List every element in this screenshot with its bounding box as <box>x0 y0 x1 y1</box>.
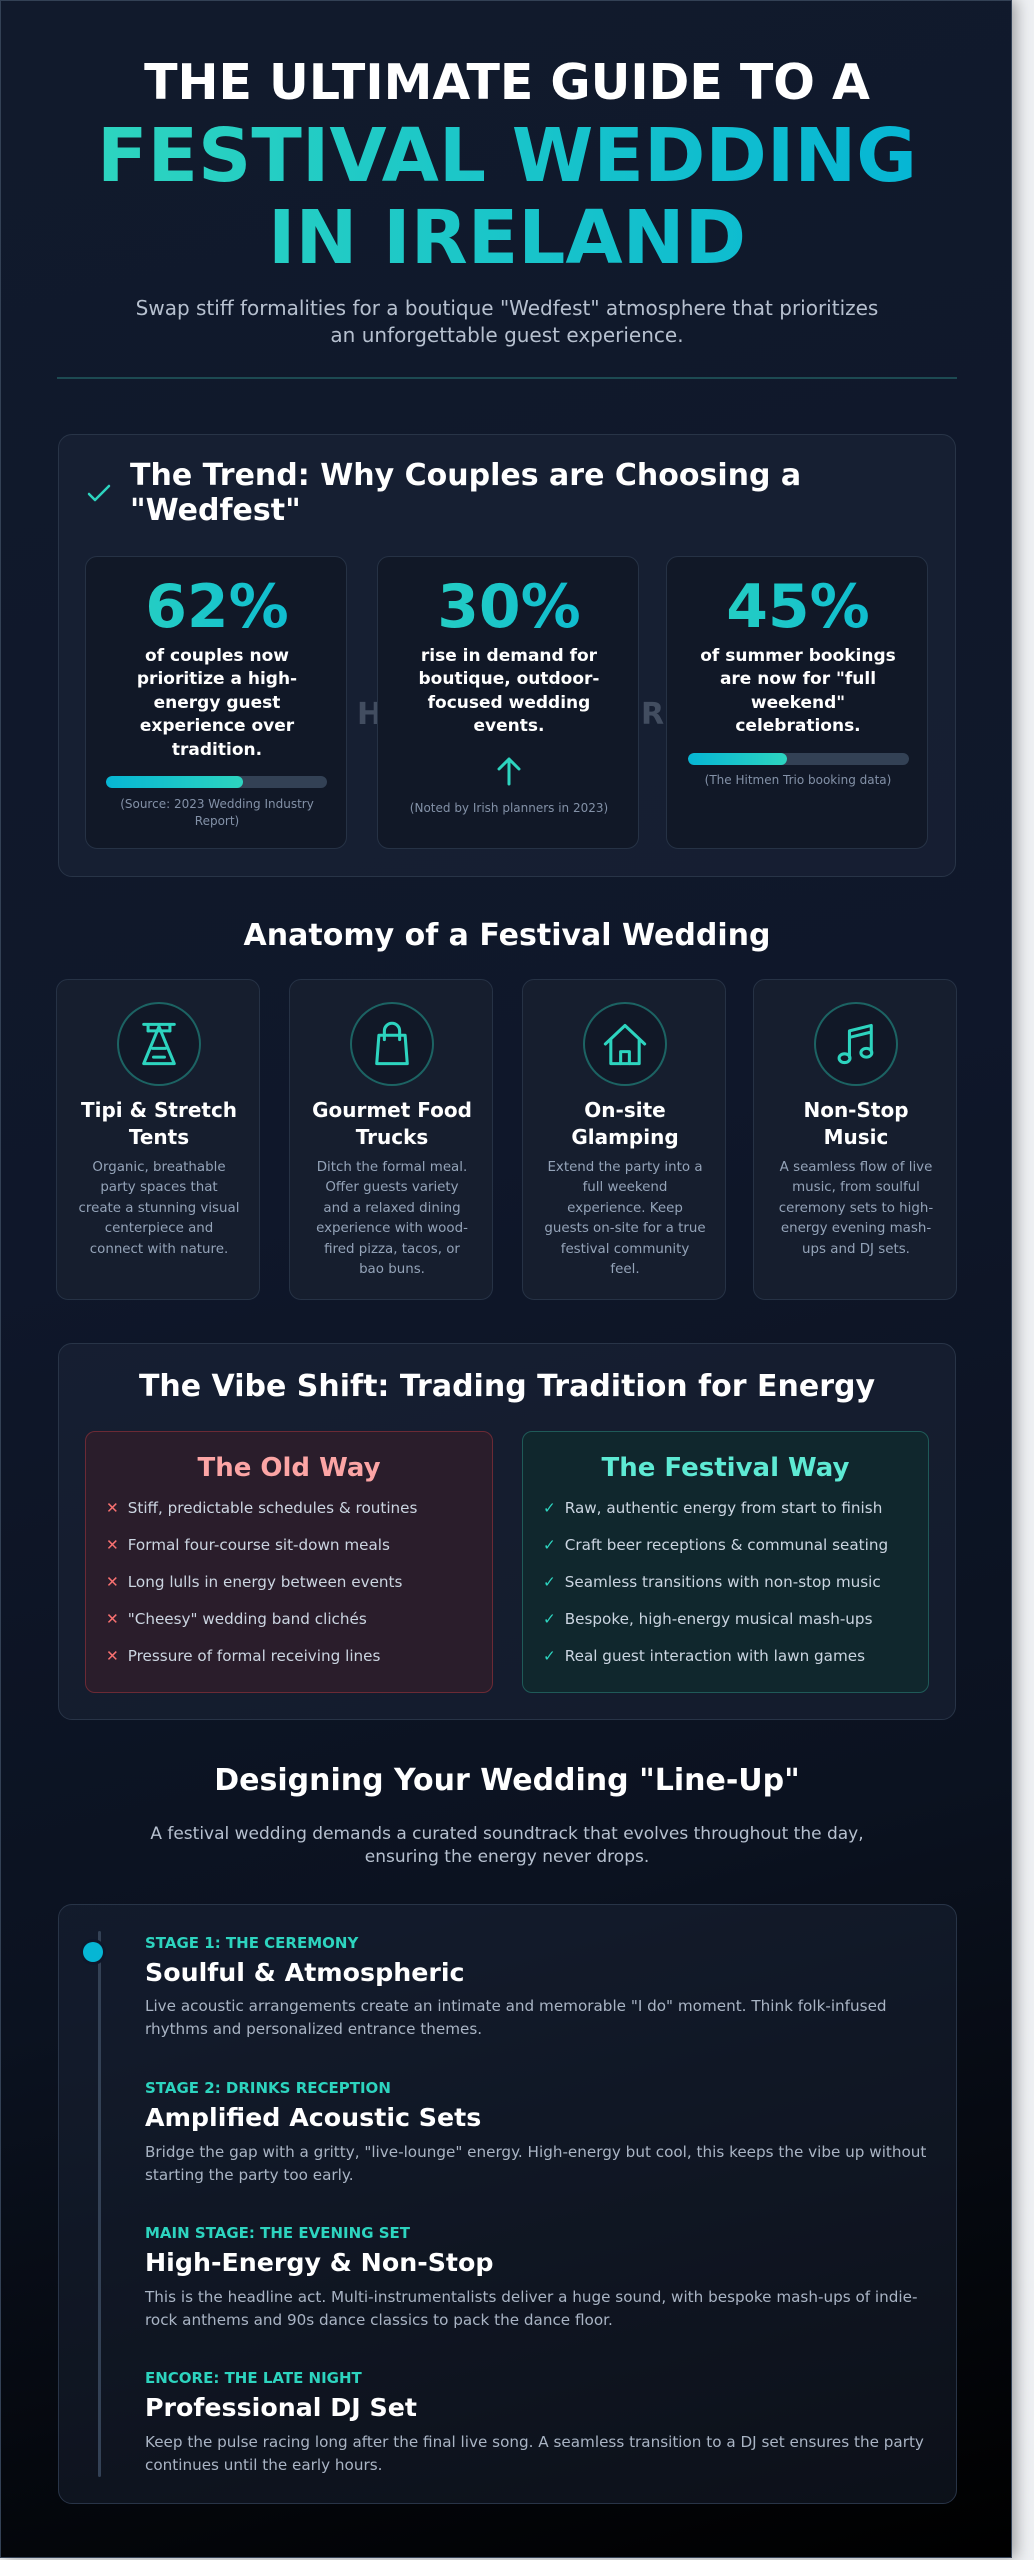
card: food trucks: bao buns. <box>359 1262 425 1277</box>
text: Amplified Acoustic Sets <box>145 2103 481 2132</box>
text: rock anthems and 90s dance classics to pack the dance floor. <box>145 2311 613 2329</box>
icon: tent <box>117 1002 201 1086</box>
icon: house <box>583 1002 667 1086</box>
box: festival way: ✓ Seamless transitions with non-stop music <box>543 1573 881 1591</box>
box: festival way: ✓ Craft beer receptions & communal seating <box>543 1536 888 1554</box>
stat card: 62% <box>85 556 347 849</box>
text: ENCORE: THE LATE NIGHT <box>145 2369 362 2387</box>
stat card: 62%: 62% <box>145 572 289 642</box>
progress bar 45% <box>688 753 909 765</box>
card: glamping: experience. Keep <box>567 1201 683 1216</box>
card: food trucks: Ditch the formal meal. <box>317 1160 467 1175</box>
text: rhythms and personalized entrance themes. <box>145 2020 482 2038</box>
progress bar 62% <box>106 776 327 788</box>
stat card: 45%: (The Hitmen Trio booking data) <box>705 773 891 787</box>
stat card: 45%: weekend" <box>751 693 845 713</box>
panel: vibe shift <box>58 1343 956 1720</box>
heading: the trend <box>130 458 801 528</box>
stat card: 45% <box>666 556 928 849</box>
card: music: ups and DJ sets. <box>802 1242 910 1257</box>
timeline line and dot <box>83 1931 103 2477</box>
panel: the trend <box>58 434 956 877</box>
box: festival way: ✓ Real guest interaction with lawn games <box>543 1647 865 1665</box>
heading: anatomy: Anatomy of a Festival Wedding <box>244 918 770 953</box>
card: food trucks: fired pizza, tacos, or <box>324 1242 460 1257</box>
subtitle: Swap stiff formalities for a boutique "Wedfest" atmosphere that prioritizes <box>136 296 878 320</box>
title: FESTIVAL WEDDING <box>97 113 917 199</box>
card: tents: connect with nature. <box>90 1242 228 1257</box>
box: old way: ✕ Stiff, predictable schedules & routines <box>106 1499 417 1517</box>
text: R <box>641 697 664 732</box>
card: food trucks: Gourmet Food <box>312 1098 472 1122</box>
card: tents <box>56 979 260 1300</box>
card: tents: centerpiece and <box>105 1221 213 1236</box>
card: glamping: feel. <box>610 1262 640 1277</box>
box: old way: ✕ "Cheesy" wedding band clichés <box>106 1610 367 1628</box>
box: festival way: ✓ Bespoke, high-energy musical mash-ups <box>543 1610 872 1628</box>
text: This is the headline act. Multi-instrumentalists deliver a huge sound, with bespoke mash-ups of indie- <box>145 2288 917 2306</box>
box: festival way: The Festival Way <box>602 1453 850 1483</box>
stage 4 <box>145 2369 924 2474</box>
stat card: 62%: Report) <box>195 814 239 828</box>
card: food trucks: Trucks <box>356 1125 428 1149</box>
stat card: 45%: of summer bookings <box>700 646 896 666</box>
text: MAIN STAGE: THE EVENING SET <box>145 2224 410 2242</box>
card: music: energy evening mash- <box>781 1221 931 1236</box>
icon: music note <box>814 1002 898 1086</box>
card: music: music, from soulful <box>792 1180 920 1195</box>
stat card: 62%: of couples now <box>145 646 289 666</box>
icon: check <box>88 484 110 502</box>
stat card: 30%: boutique, outdoor- <box>419 669 599 689</box>
stat card: 45%: are now for "full <box>720 669 876 689</box>
card: tents: Tents <box>129 1125 189 1149</box>
stat card: 30%: rise in demand for <box>421 646 597 666</box>
card: glamping <box>522 979 726 1300</box>
card: glamping: Extend the party into a <box>547 1160 703 1175</box>
card: glamping: guests on-site for a true <box>544 1221 706 1236</box>
heading: line-up: Designing Your Wedding "Line-Up" <box>214 1763 800 1798</box>
text: Live acoustic arrangements create an intimate and memorable "I do" moment. Think folk-infused <box>145 1997 887 2015</box>
card: tents: create a stunning visual <box>79 1201 239 1216</box>
stat card: 30%: focused wedding <box>428 693 590 713</box>
text: Bridge the gap with a gritty, "live-lounge" energy. High-energy but cool, this keeps the vibe up without <box>145 2143 926 2161</box>
card: glamping: festival community <box>561 1242 689 1257</box>
card: music: ceremony sets to high- <box>779 1201 933 1216</box>
card: glamping: full weekend <box>583 1180 667 1195</box>
card: tents: Organic, breathable <box>92 1160 226 1175</box>
card: music: Non-Stop <box>803 1098 909 1122</box>
text: Professional DJ Set <box>145 2393 417 2422</box>
card: food trucks: and a relaxed dining <box>323 1201 461 1216</box>
card: music: Music <box>824 1125 888 1149</box>
stat card: 62%: prioritize a high- <box>137 669 297 689</box>
box: old way: ✕ Long lulls in energy between events <box>106 1573 402 1591</box>
heading: the trend: "Wedfest" <box>130 493 301 528</box>
watermark letters <box>357 697 908 786</box>
stat card: 30%: (Noted by Irish planners in 2023) <box>410 801 608 815</box>
text: line-up intro: ensuring the energy never drops. <box>365 1847 649 1867</box>
stat card: 30% <box>377 556 639 849</box>
box: old way: ✕ Formal four-course sit-down meals <box>106 1536 390 1554</box>
icon: up arrow <box>497 757 520 786</box>
text: Keep the pulse racing long after the final live song. A seamless transition to a DJ set ensures the party <box>145 2433 924 2451</box>
card: music <box>753 979 957 1300</box>
stat card: 30%: 30% <box>437 572 581 642</box>
card: food trucks: experience with wood- <box>316 1221 468 1236</box>
stat card: 62%: energy guest <box>154 693 280 713</box>
text: line-up intro <box>150 1824 864 1867</box>
card: glamping: Glamping <box>571 1125 679 1149</box>
stage 2 <box>145 2079 926 2184</box>
text: starting the party too early. <box>145 2166 354 2184</box>
card: tents: Tipi & Stretch <box>81 1098 237 1122</box>
card: food trucks <box>289 979 493 1300</box>
text: line-up intro: A festival wedding demands a curated soundtrack that evolves throughout the day, <box>150 1824 864 1844</box>
text: STAGE 1: THE CEREMONY <box>145 1934 358 1952</box>
stat card: 62%: (Source: 2023 Wedding Industry <box>120 797 314 811</box>
box: old way: ✕ Pressure of formal receiving lines <box>106 1647 380 1665</box>
stage 3 <box>144 2224 917 2329</box>
icon: bag <box>350 1002 434 1086</box>
stage 1 <box>145 1934 887 2038</box>
stat card: 62%: experience over <box>140 716 294 736</box>
card: tents: party spaces that <box>100 1180 218 1195</box>
panel: timeline <box>58 1904 957 2504</box>
card: food trucks: Offer guests variety <box>325 1180 459 1195</box>
text: Soulful & Atmospheric <box>145 1958 465 1987</box>
card: music: A seamless flow of live <box>780 1160 932 1175</box>
box: old way <box>85 1431 493 1693</box>
heading: vibe shift: The Vibe Shift: Trading Tradition for Energy <box>139 1369 875 1404</box>
subtitle <box>136 296 878 347</box>
card: glamping: On-site <box>584 1098 666 1122</box>
heading: the trend: The Trend: Why Couples are Choosing a <box>130 458 801 493</box>
stat card: 45%: celebrations. <box>735 716 861 736</box>
text: High-Energy & Non-Stop <box>145 2248 494 2277</box>
text: STAGE 2: DRINKS RECEPTION <box>145 2079 391 2097</box>
box: old way: The Old Way <box>197 1453 381 1483</box>
stat card: 45%: 45% <box>726 572 870 642</box>
text: continues until the early hours. <box>145 2456 382 2474</box>
box: festival way: ✓ Raw, authentic energy from start to finish <box>543 1499 882 1517</box>
title <box>97 54 917 281</box>
title: THE ULTIMATE GUIDE TO A <box>144 54 870 111</box>
subtitle: an unforgettable guest experience. <box>330 323 684 347</box>
box: festival way <box>522 1431 929 1693</box>
stat card: 62%: tradition. <box>172 740 262 760</box>
text: H <box>357 697 382 732</box>
title: IN IRELAND <box>268 195 746 281</box>
stat card: 30%: events. <box>474 716 544 736</box>
